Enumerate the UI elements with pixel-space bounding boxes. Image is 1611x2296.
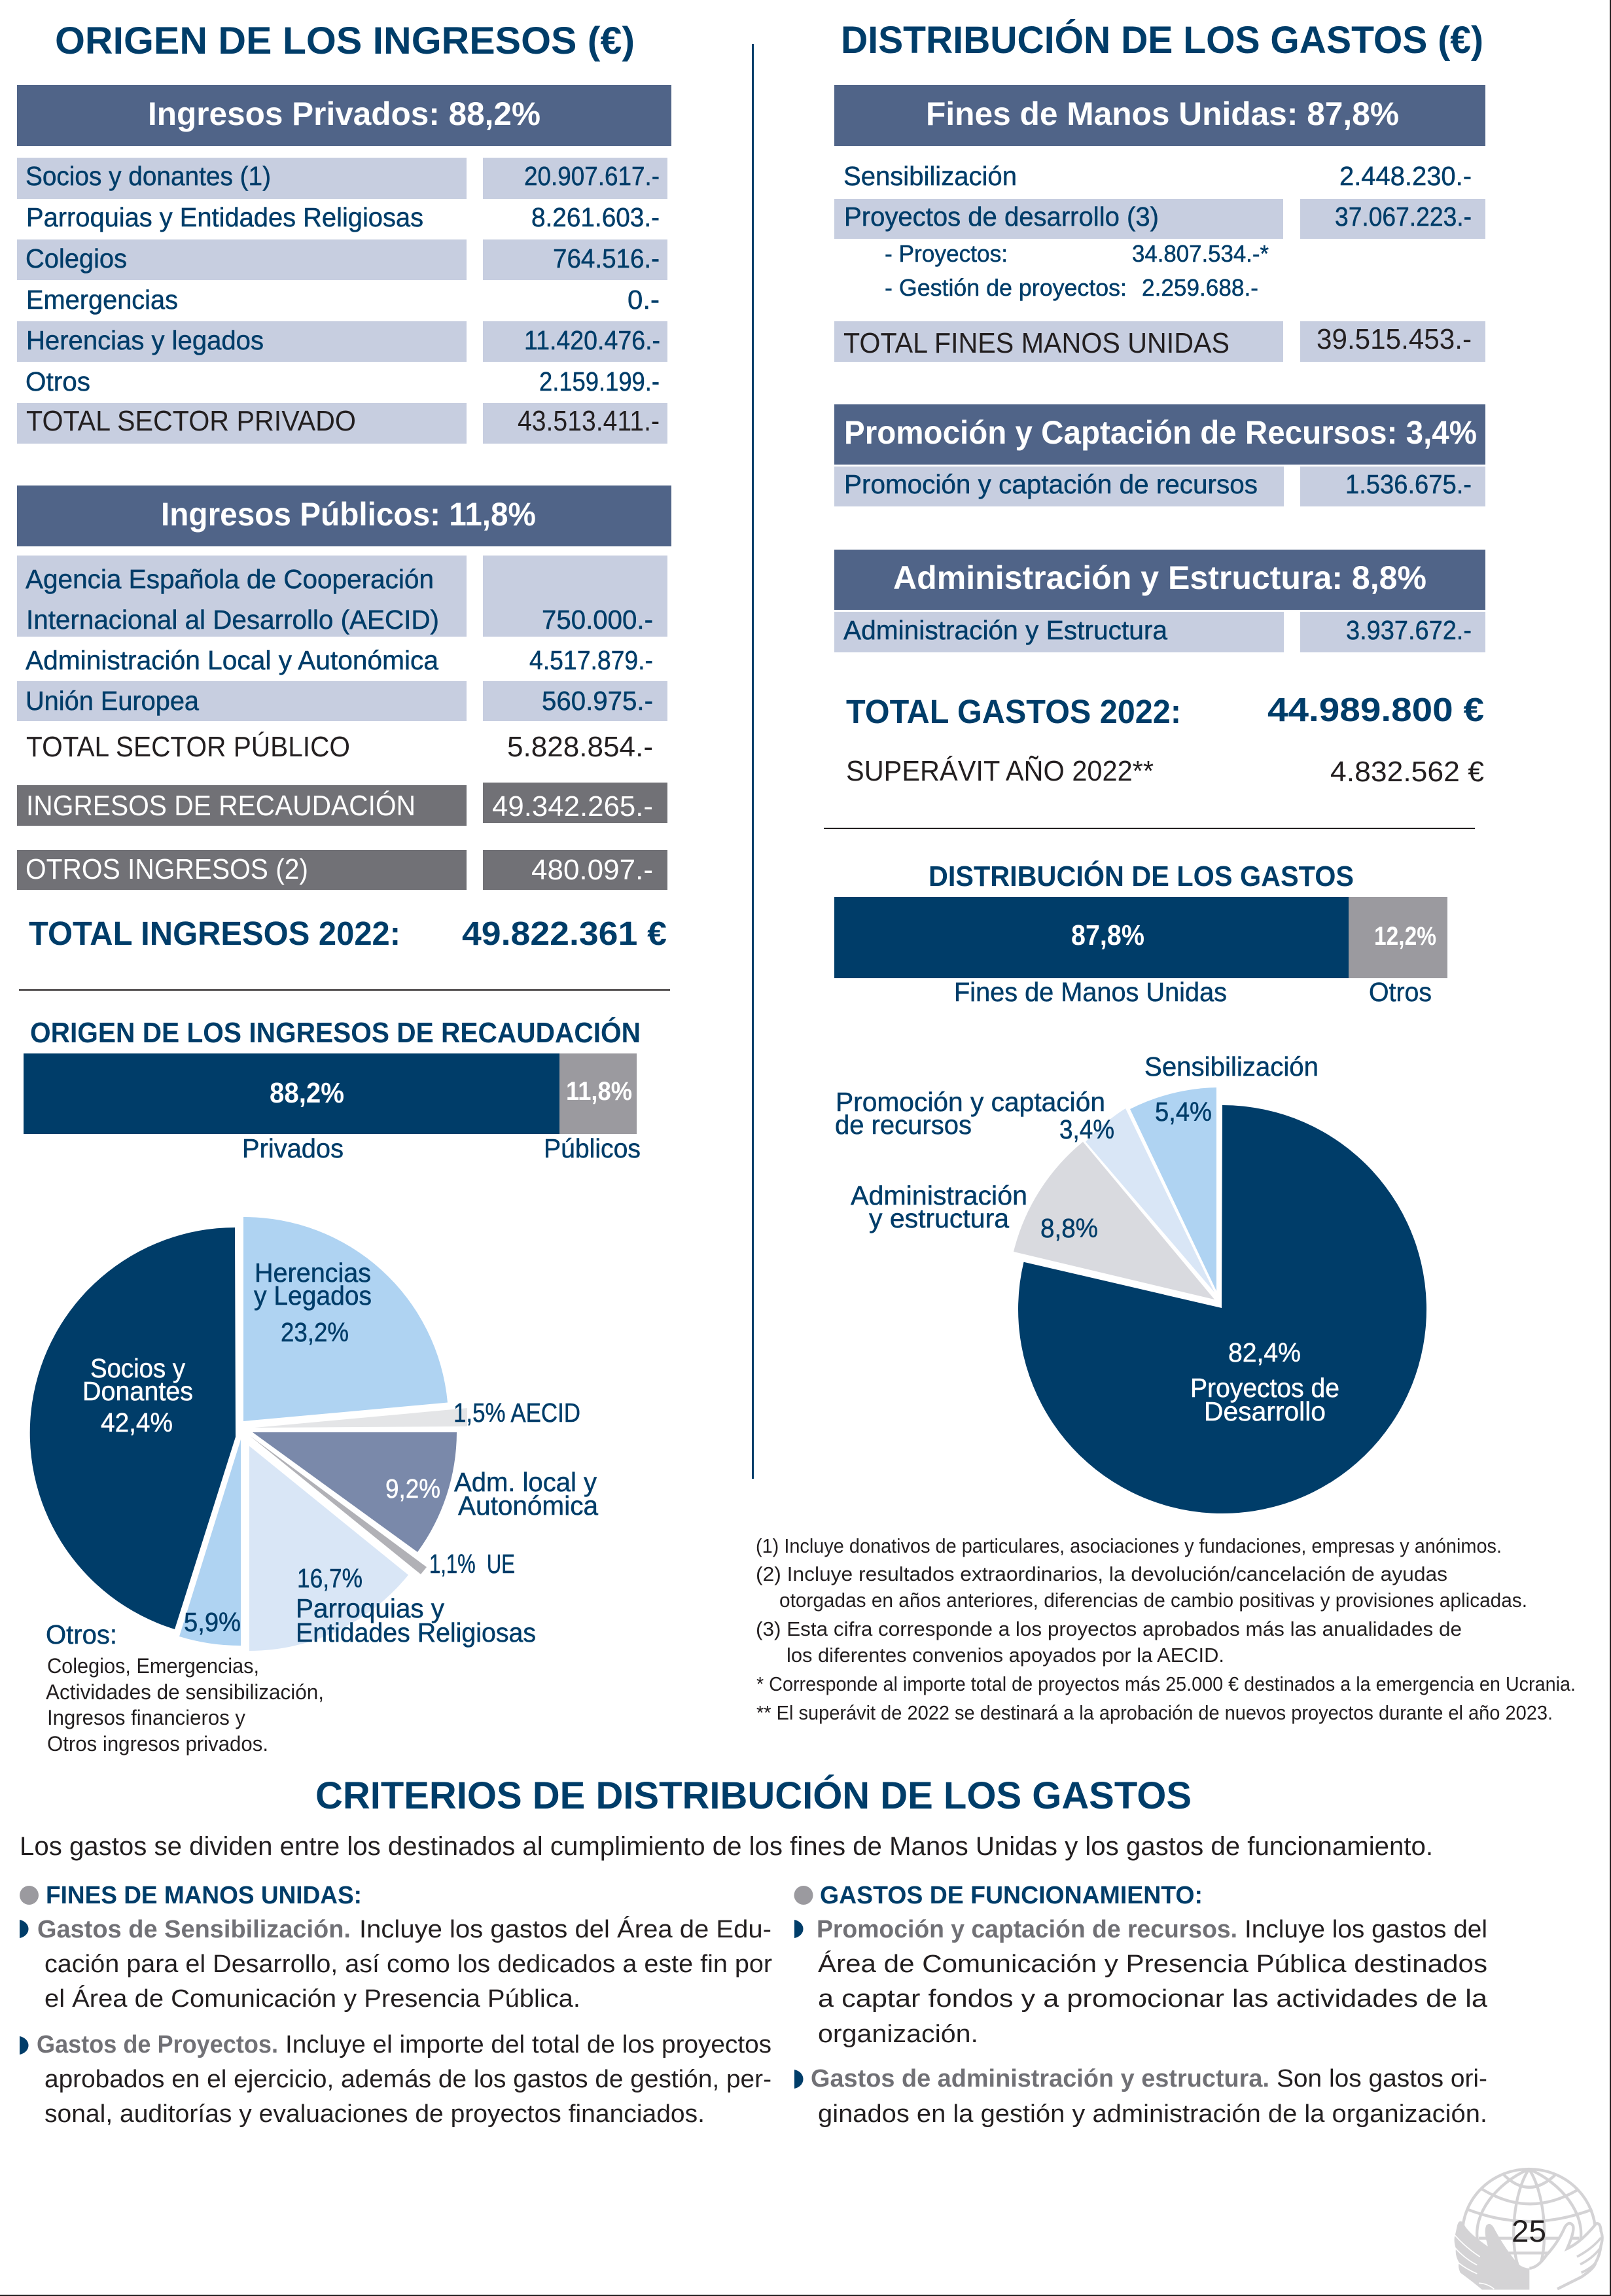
intro text: Los gastos se dividen entre los destinados al cumplimiento de los fines de Manos Unidas y los gastos de funcionamiento.	[20, 1832, 1433, 1861]
label: socios: 42,4%	[101, 1407, 173, 1438]
text block: administración y estructura: Gastos de administración y estructura.	[811, 2065, 1269, 2093]
row: proyectos de desarrollo	[834, 199, 1485, 239]
heading band: fines de manos unidas	[834, 85, 1485, 146]
heading band: ingresos privados: Ingresos Privados: 88,2%	[148, 96, 540, 132]
row: socios y donantes: 20.907.617.-	[524, 161, 660, 191]
footnotes: (1) Incluye donativos de particulares, asociaciones y fundaciones, empresas y anónimos.	[756, 1534, 1502, 1557]
row: AECID: Internacional al Desarrollo (AECID)	[26, 605, 439, 635]
heading: criterios de distribución: CRITERIOS DE DISTRIBUCIÓN DE LOS GASTOS	[315, 1775, 1192, 1817]
label: socios: Donantes	[82, 1376, 193, 1406]
label: adm. local: Adm. local y	[454, 1467, 597, 1497]
row: sensibilización: 2.448.230.-	[1339, 161, 1472, 191]
total ingresos: TOTAL INGRESOS 2022:	[29, 915, 400, 952]
wedge: otros	[179, 1439, 241, 1646]
row: ingresos de recaudación: INGRESOS DE RECAUDACIÓN	[26, 790, 416, 822]
row: parroquias: Parroquias y Entidades Religiosas	[26, 202, 423, 232]
row: colegios: Colegios	[26, 243, 127, 274]
text block: gastos de sensibilización	[20, 1915, 772, 2013]
superávit: SUPERÁVIT AÑO 2022**	[846, 754, 1154, 787]
text block: administración y estructura: Son los gastos ori-	[1277, 2065, 1487, 2093]
label: herencias: Herencias	[255, 1258, 371, 1288]
text block: administración y estructura: ginados en la gestión y administración de la organización.	[818, 2100, 1487, 2128]
row: total fines manos unidas: 39.515.453.-	[1317, 323, 1472, 355]
wedge: promoción	[1086, 1108, 1214, 1292]
row: otros ingresos: 480.097.-	[531, 854, 653, 886]
heading band: administración: Administración y Estructura: 8,8%	[893, 559, 1426, 596]
text block: gastos de proyectos	[20, 2031, 771, 2128]
footnotes: (2) Incluye resultados extraordinarios, la devolución/cancelación de ayudas	[756, 1563, 1447, 1585]
chart: distribución de los gastos: 87,8%	[1071, 919, 1144, 951]
row: parroquias	[26, 202, 660, 232]
total gastos: 44.989.800 €	[1267, 691, 1484, 728]
heading band: ingresos públicos: Ingresos Públicos: 11,8%	[161, 496, 536, 533]
wedge: socios y donantes	[30, 1227, 236, 1629]
label: UE: 1,1% UE	[429, 1549, 515, 1579]
label: administración	[851, 1180, 1098, 1243]
row: colegios	[17, 239, 667, 280]
label: otros: Otros:	[46, 1619, 117, 1650]
row: promoción: Promoción y captación de recursos	[844, 469, 1258, 499]
row: herencias y legados	[17, 321, 667, 362]
chart: pie distribución de gastos	[835, 1051, 1426, 1513]
text block: promoción y captación	[794, 1916, 1488, 2048]
row: otros ingresos: OTROS INGRESOS (2)	[26, 853, 308, 885]
chart: origen de los ingresos de recaudación	[24, 1016, 641, 1163]
row: otros	[26, 366, 660, 397]
wedge: AECID	[255, 1408, 467, 1428]
label: socios	[82, 1353, 193, 1438]
row: total sector privado: TOTAL SECTOR PRIVADO	[26, 405, 356, 437]
row: herencias y legados: Herencias y legados	[26, 325, 264, 355]
label: sensibilización	[1144, 1051, 1319, 1127]
row: administración local: 4.517.879.-	[529, 645, 653, 675]
label: herencias: y Legados	[254, 1280, 372, 1311]
row: unión europea	[17, 681, 667, 721]
row: otros ingresos	[17, 850, 667, 890]
label: proyectos: Proyectos de	[1190, 1373, 1339, 1403]
row: gestión detalle: 2.259.688.-	[1142, 274, 1258, 301]
text block: gastos de proyectos: Gastos de Proyectos.	[37, 2031, 278, 2058]
row: ingresos de recaudación	[17, 783, 667, 826]
text block: gastos de sensibilización: Gastos de Sensibilización.	[37, 1916, 351, 1943]
superávit	[846, 754, 1484, 788]
total ingresos: 49.822.361 €	[462, 915, 667, 952]
chart: pie origen de ingresos	[30, 1217, 598, 1756]
row: total sector público	[26, 731, 653, 763]
label: promoción: de recursos	[835, 1110, 972, 1140]
label: herencias	[254, 1258, 372, 1347]
chart: distribución de los gastos: DISTRIBUCIÓN DE LOS GASTOS	[929, 860, 1354, 892]
row: total fines manos unidas: TOTAL FINES MANOS UNIDAS	[843, 327, 1230, 359]
label: administración: 8,8%	[1040, 1213, 1098, 1243]
label: parroquias	[296, 1563, 536, 1648]
row: ingresos de recaudación: 49.342.265.-	[492, 790, 653, 822]
row: emergencias: 0.-	[628, 285, 660, 315]
row: herencias y legados: 11.420.476.-	[524, 325, 660, 355]
label: otros	[46, 1619, 324, 1756]
label: otros: Ingresos financieros y	[47, 1706, 245, 1729]
label: administración: y estructura	[869, 1203, 1009, 1233]
label: administración: Administración	[851, 1180, 1027, 1210]
row: promoción: 1.536.675.-	[1345, 469, 1472, 499]
bullet heading: GASTOS DE FUNCIONAMIENTO:	[820, 1882, 1203, 1909]
panel: fines de manos unidas	[20, 1882, 772, 2128]
text block: gastos de sensibilización: Incluye los gastos del Área de Edu-	[359, 1915, 771, 1943]
label: socios: Socios y	[90, 1353, 185, 1383]
row: proyectos detalle: 34.807.534.-*	[1132, 240, 1269, 267]
row: total sector privado	[17, 403, 667, 444]
row: sensibilización: Sensibilización	[843, 161, 1017, 191]
label: AECID: 1,5% AECID	[453, 1398, 580, 1428]
label: adm. local: Autonómica	[458, 1491, 598, 1521]
label: parroquias: Parroquias y	[296, 1593, 444, 1623]
footnotes: los diferentes convenios apoyados por la AECID.	[787, 1644, 1224, 1667]
wedge: parroquias	[249, 1446, 408, 1651]
text block: gastos de proyectos: sonal, auditorías y evaluaciones de proyectos financiados.	[44, 2100, 705, 2128]
total gastos	[846, 691, 1484, 730]
text block: promoción y captación: Incluye los gastos del	[1245, 1916, 1487, 1943]
row: socios y donantes: Socios y donantes (1)	[26, 161, 271, 191]
wedge: proyectos de desarrollo	[1018, 1105, 1426, 1513]
text block: promoción y captación: Área de Comunicación y Presencia Pública destinados	[818, 1950, 1487, 1978]
row: colegios: 764.516.-	[553, 243, 660, 274]
chart: distribución de los gastos: 12,2%	[1374, 922, 1436, 951]
footnotes: otorgadas en años anteriores, diferencias de cambio positivas y provisiones aplicadas.	[779, 1589, 1527, 1612]
label: promoción	[835, 1087, 1114, 1144]
row: proyectos de desarrollo: 37.067.223.-	[1335, 202, 1472, 232]
label: otros percent: 5,9%	[184, 1607, 241, 1637]
row: total sector privado: 43.513.411.-	[518, 405, 660, 437]
label: sensibilización: 5,4%	[1155, 1097, 1212, 1127]
row: AECID	[17, 556, 667, 637]
chart: origen de los ingresos de recaudación: 11,8%	[566, 1077, 632, 1106]
row: otros: 2.159.199.-	[539, 366, 660, 397]
total gastos: TOTAL GASTOS 2022:	[846, 693, 1181, 730]
text block: gastos de sensibilización: cación para el Desarrollo, así como los dedicados a este fin por	[44, 1951, 772, 1978]
label: parroquias: Entidades Religiosas	[296, 1617, 536, 1648]
heading band: promoción: Promoción y Captación de Recursos: 3,4%	[844, 414, 1477, 451]
row: parroquias: 8.261.603.-	[531, 202, 660, 232]
wedge: herencias y legados	[243, 1217, 448, 1421]
text block: gastos de sensibilización: el Área de Comunicación y Presencia Pública.	[44, 1985, 580, 2013]
label: otros: Colegios, Emergencias,	[47, 1654, 259, 1678]
label: proyectos: Desarrollo	[1204, 1396, 1326, 1426]
label: otros: Actividades de sensibilización,	[46, 1680, 324, 1704]
page number: 25	[1512, 2214, 1546, 2248]
row: proyectos detalle: - Proyectos:	[885, 240, 1008, 267]
label: promoción: 3,4%	[1059, 1114, 1114, 1144]
chart: origen de los ingresos de recaudación: Públicos	[544, 1133, 641, 1163]
row: socios y donantes	[17, 158, 667, 199]
row: administración: Administración y Estructura	[843, 615, 1167, 645]
row: proyectos de desarrollo: Proyectos de desarrollo (3)	[844, 202, 1159, 232]
label: sensibilización: Sensibilización	[1144, 1051, 1319, 1082]
wedge: administración	[1014, 1142, 1214, 1299]
footnotes: ** El superávit de 2022 se destinará a la aprobación de nuevos proyectos durante el año 2023.	[756, 1701, 1553, 1724]
text block: promoción y captación: organización.	[818, 2021, 978, 2048]
text block: gastos de proyectos: Incluye el importe del total de los proyectos	[285, 2031, 771, 2058]
panel: distribución de los gastos	[834, 19, 1485, 788]
title: origen de los ingresos: ORIGEN DE LOS INGRESOS (€)	[55, 20, 635, 62]
chart: origen de los ingresos de recaudación: Privados	[242, 1133, 344, 1163]
row: administración: 3.937.672.-	[1346, 615, 1472, 645]
text block: promoción y captación: Promoción y captación de recursos.	[817, 1916, 1237, 1943]
wedge: unión europea	[250, 1436, 427, 1574]
heading band: ingresos privados	[17, 85, 671, 146]
heading band: ingresos públicos	[17, 486, 671, 546]
wedge: sensibilización	[1130, 1087, 1216, 1291]
heading band: promoción	[834, 404, 1485, 465]
row: unión europea: Unión Europea	[26, 686, 199, 716]
row: proyectos detalle	[885, 240, 1269, 267]
row: promoción	[834, 467, 1485, 506]
icon: globe and hands logo	[1455, 2169, 1602, 2289]
chart: distribución de los gastos: Fines de Manos Unidas	[954, 977, 1227, 1007]
text block: administración y estructura	[794, 2065, 1487, 2128]
label: adm. local	[454, 1467, 598, 1521]
footnotes	[756, 1534, 1576, 1724]
superávit: 4.832.562 €	[1330, 756, 1484, 788]
row: total fines manos unidas	[834, 321, 1485, 362]
label: otros: Otros ingresos privados.	[47, 1732, 268, 1756]
row: gestión detalle	[885, 274, 1258, 301]
label: herencias: 23,2%	[281, 1317, 349, 1347]
label: parroquias: 16,7%	[297, 1563, 363, 1593]
row: administración local	[26, 645, 653, 675]
row: AECID: Agencia Española de Cooperación	[26, 564, 434, 594]
row: unión europea: 560.975.-	[542, 686, 653, 716]
row: otros: Otros	[26, 366, 90, 397]
label: promoción: Promoción y captación	[836, 1087, 1105, 1117]
chart: distribución de los gastos	[834, 860, 1447, 1007]
row: administración local: Administración Local y Autonómica	[26, 645, 438, 675]
label: proyectos	[1190, 1337, 1339, 1426]
chart: origen de los ingresos de recaudación: 88,2%	[270, 1077, 344, 1109]
footnotes: (3) Esta cifra corresponde a los proyectos aprobados más las anualidades de	[756, 1617, 1462, 1640]
panel: gastos de funcionamiento	[794, 1882, 1488, 2128]
heading band: administración	[834, 550, 1485, 610]
panel: origen de los ingresos	[17, 20, 671, 952]
text block: promoción y captación: a captar fondos y a promocionar las actividades de la	[818, 1985, 1488, 2013]
text block: gastos de proyectos: aprobados en el ejercicio, además de los gastos de gestión, per-	[44, 2066, 771, 2093]
row: gestión detalle: - Gestión de proyectos:	[885, 274, 1127, 301]
title: distribución de los gastos: DISTRIBUCIÓN DE LOS GASTOS (€)	[841, 19, 1483, 62]
label: adm. local percent: 9,2%	[385, 1474, 440, 1504]
wedge: administración local y autonómica	[253, 1432, 457, 1552]
row: emergencias	[26, 285, 660, 315]
row: administración	[834, 612, 1485, 652]
row: emergencias: Emergencias	[26, 285, 178, 315]
row: total sector público: TOTAL SECTOR PÚBLICO	[26, 731, 350, 763]
chart: origen de los ingresos de recaudación: ORIGEN DE LOS INGRESOS DE RECAUDACIÓN	[30, 1016, 641, 1049]
label: proyectos: 82,4%	[1228, 1337, 1301, 1368]
bullet heading: FINES DE MANOS UNIDAS:	[46, 1882, 362, 1909]
row: sensibilización	[843, 161, 1472, 191]
total ingresos	[29, 915, 667, 952]
row: AECID: 750.000.-	[542, 605, 653, 635]
heading band: fines de manos unidas: Fines de Manos Unidas: 87,8%	[926, 96, 1399, 132]
chart: distribución de los gastos: Otros	[1369, 977, 1432, 1007]
row: total sector público: 5.828.854.-	[507, 731, 653, 763]
